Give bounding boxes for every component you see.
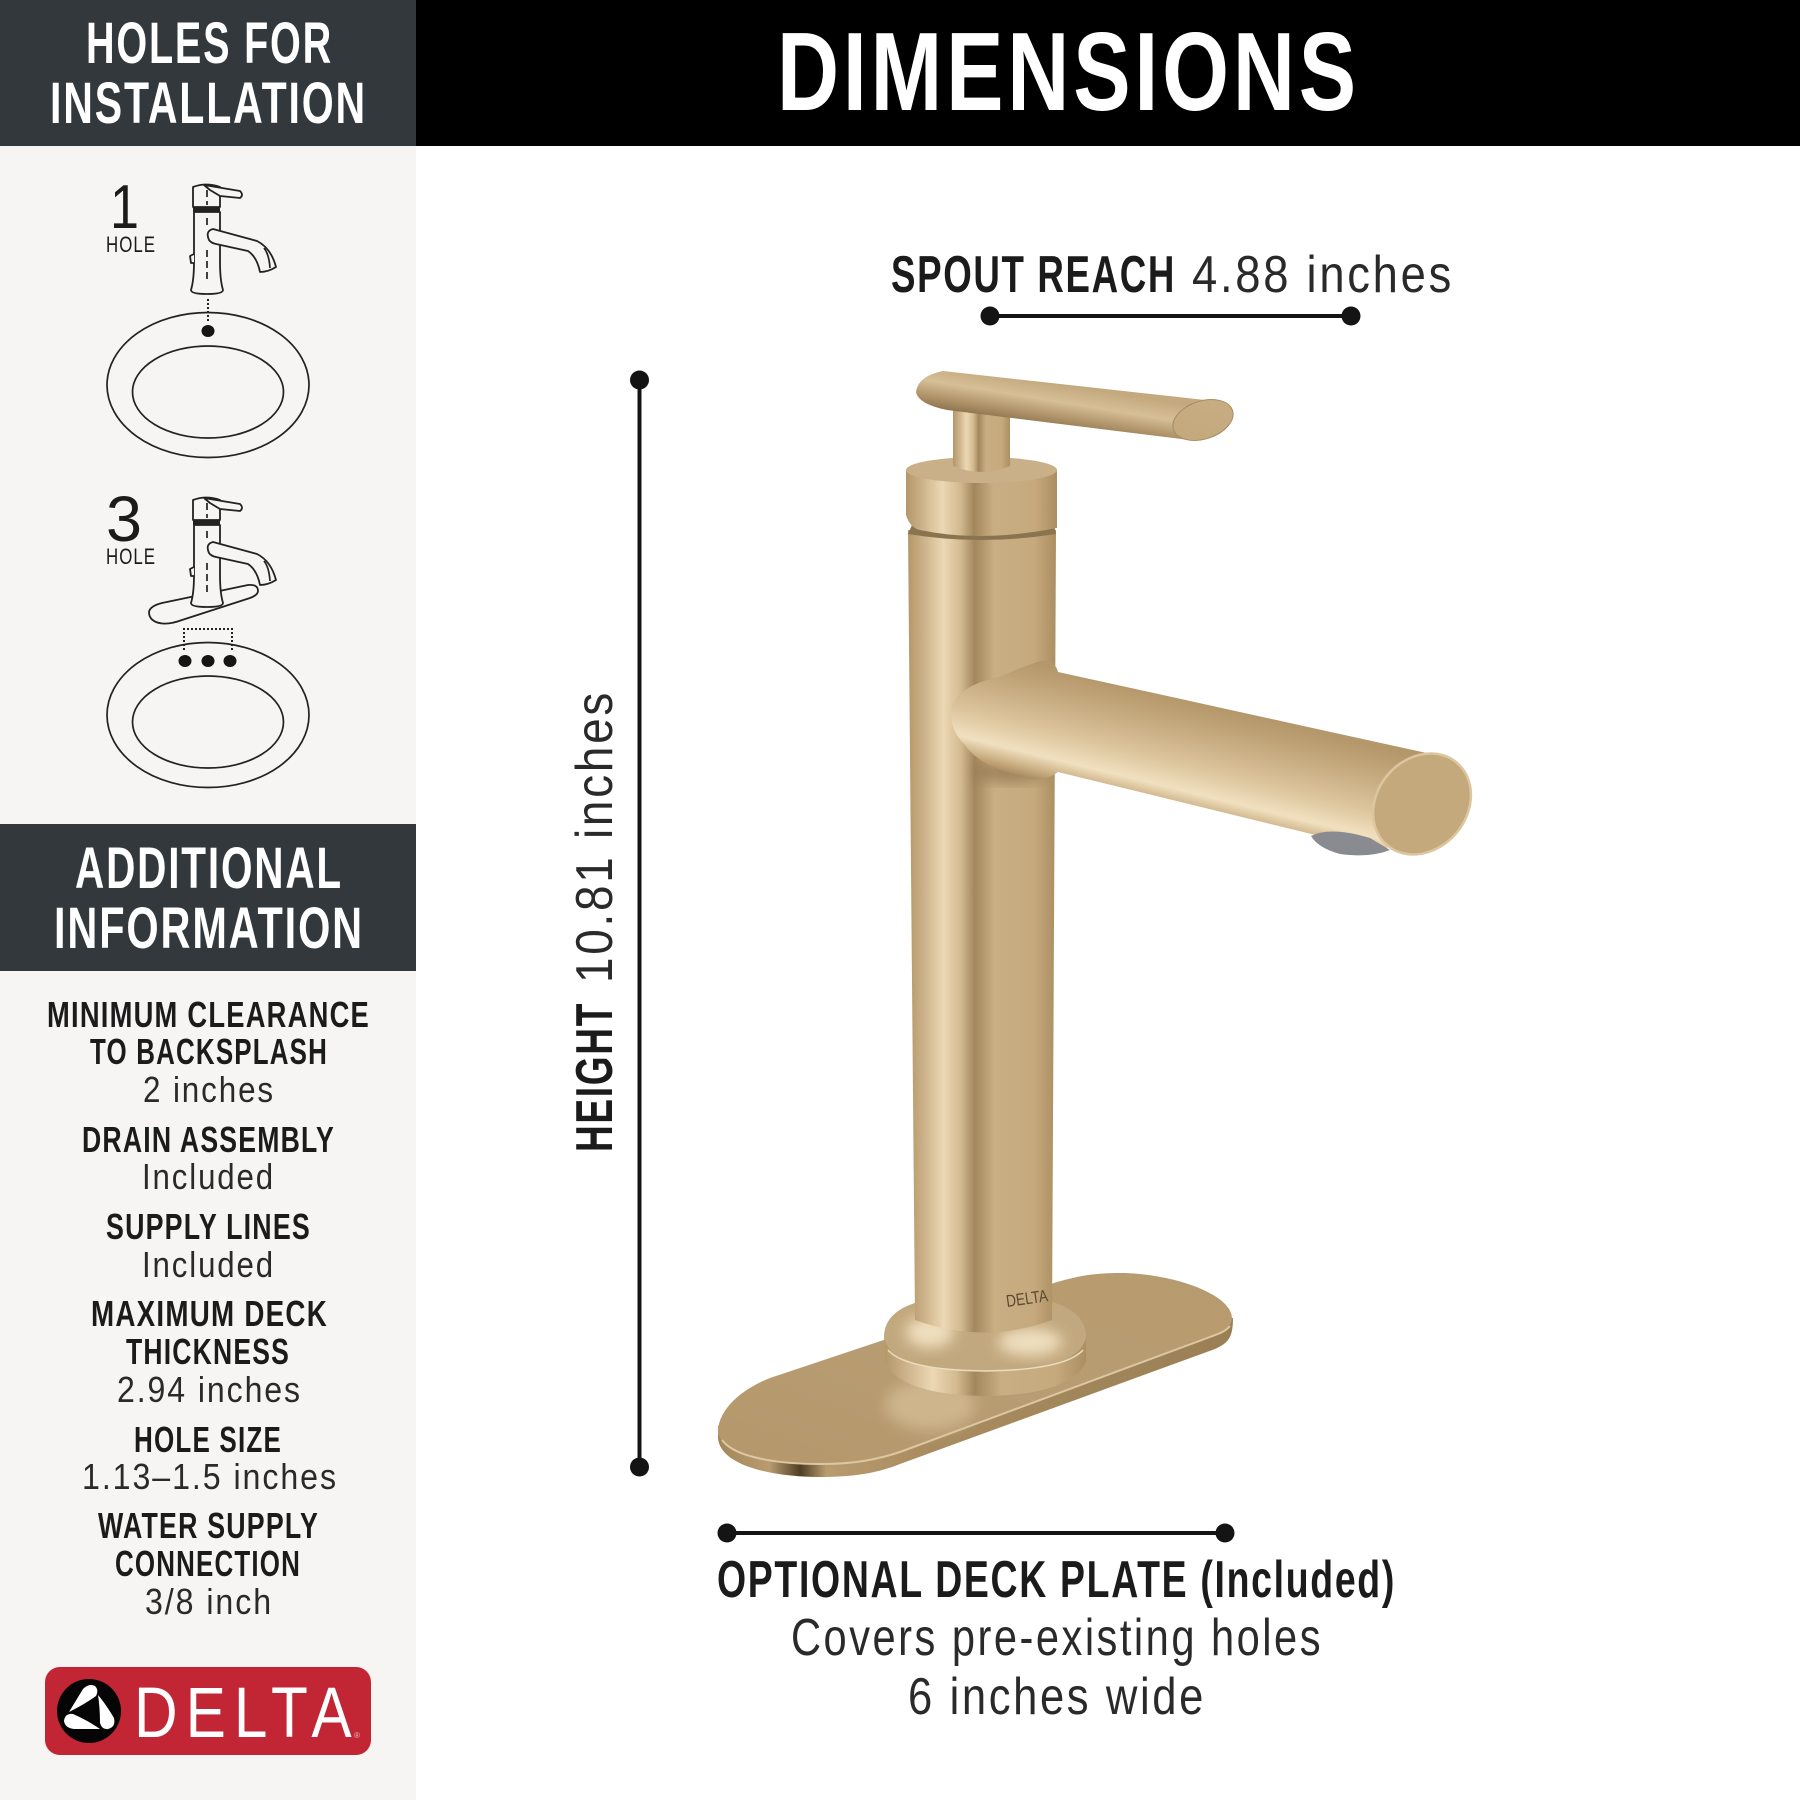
icon: single hole faucet <box>190 184 276 294</box>
panel: three hole installation <box>106 483 309 788</box>
dotted guide: 3 holes <box>184 629 232 650</box>
spec: minimum clearance: MINIMUM CLEARANCE <box>47 994 370 1035</box>
header band: holes for installation <box>0 0 416 146</box>
heading: additional information line 2: INFORMATION <box>54 896 364 961</box>
panel: additional information list <box>47 994 370 1622</box>
spec: maximum deck thickness: 2.94 inches <box>117 1369 302 1410</box>
header band: dimensions <box>416 0 1800 146</box>
spec: water supply connection <box>98 1505 319 1622</box>
spec: minimum clearance <box>47 994 370 1110</box>
icon: three hole faucet <box>190 498 276 607</box>
spout <box>951 660 1491 874</box>
arrow: height bar <box>630 370 649 1476</box>
shadow under spout <box>974 762 1046 782</box>
heading: holes for installation line 1: HOLES FOR <box>86 11 333 76</box>
spec: water supply connection: 3/8 inch <box>145 1581 273 1622</box>
icon: sink with three holes <box>107 642 309 788</box>
icon: sink with one hole <box>107 312 309 458</box>
illustration: brushed gold faucet <box>718 371 1491 1477</box>
header band: additional information <box>0 824 416 971</box>
spec: hole size: HOLE SIZE <box>134 1419 282 1460</box>
heading: holes for installation line 2: INSTALLATION <box>50 71 367 136</box>
spec: hole size: 1.13–1.5 inches <box>82 1456 338 1497</box>
label: hole: HOLE <box>106 544 156 569</box>
sidebar background <box>0 0 416 1800</box>
lever handle <box>916 371 1238 448</box>
spec: water supply connection: CONNECTION <box>115 1543 301 1584</box>
dimension label: height: HEIGHT <box>566 1002 624 1152</box>
text: width: 6 inches wide <box>908 1668 1206 1726</box>
spec: drain assembly: DRAIN ASSEMBLY <box>82 1119 335 1160</box>
spec: supply lines: SUPPLY LINES <box>106 1206 311 1247</box>
deck plate <box>718 1273 1233 1477</box>
spec: supply lines <box>106 1206 311 1285</box>
spec: supply lines: Included <box>142 1244 275 1285</box>
dimension label: spout reach: SPOUT REACH <box>891 246 1176 304</box>
brand mark on body: DELTA <box>1005 1286 1050 1311</box>
spec: drain assembly: Included <box>142 1156 275 1197</box>
lever stem <box>953 408 1010 472</box>
arrow: spout reach bar <box>980 306 1360 326</box>
title: DIMENSIONS <box>777 10 1360 134</box>
spec: drain assembly <box>82 1119 335 1197</box>
base flange <box>884 1302 1086 1396</box>
dimension label: optional deck plate <box>717 1551 1396 1726</box>
spec: maximum deck thickness: MAXIMUM DECK <box>91 1293 328 1334</box>
dimension label: height: 10.81 inches <box>566 690 624 983</box>
spec: maximum deck thickness <box>91 1293 328 1410</box>
spec: hole size <box>82 1419 338 1497</box>
number: 3 hole: 3 <box>106 483 142 555</box>
icon: deck plate <box>149 585 258 624</box>
label: hole: HOLE <box>106 232 156 257</box>
registered mark: ® <box>354 1731 360 1740</box>
wordmark: delta: DELTA <box>134 1672 352 1752</box>
aerator <box>1311 831 1390 855</box>
panel: one hole installation <box>106 173 309 458</box>
icon: delta mark <box>57 1679 121 1743</box>
body column <box>908 530 1056 1332</box>
dimension label: height <box>566 690 624 1152</box>
spec: minimum clearance: 2 inches <box>143 1069 275 1110</box>
spec: water supply connection: WATER SUPPLY <box>98 1505 319 1546</box>
collar <box>906 457 1057 540</box>
dimension label: spout reach: 4.88 inches <box>1192 246 1454 304</box>
spout end cap <box>1353 734 1491 874</box>
logo: delta <box>45 1667 371 1755</box>
arrow: deck plate bar <box>718 1524 1234 1542</box>
number: 1 hole: 1 <box>110 173 139 242</box>
spec: maximum deck thickness: THICKNESS <box>126 1331 290 1372</box>
dotted guide: 1 hole <box>207 299 209 323</box>
heading: additional information line 1: ADDITIONAL <box>75 836 343 901</box>
text: covers holes: Covers pre-existing holes <box>791 1609 1323 1667</box>
spec: minimum clearance: TO BACKSPLASH <box>90 1031 328 1072</box>
dimension label: optional deck plate: OPTIONAL DECK PLATE (Included) <box>717 1551 1396 1609</box>
